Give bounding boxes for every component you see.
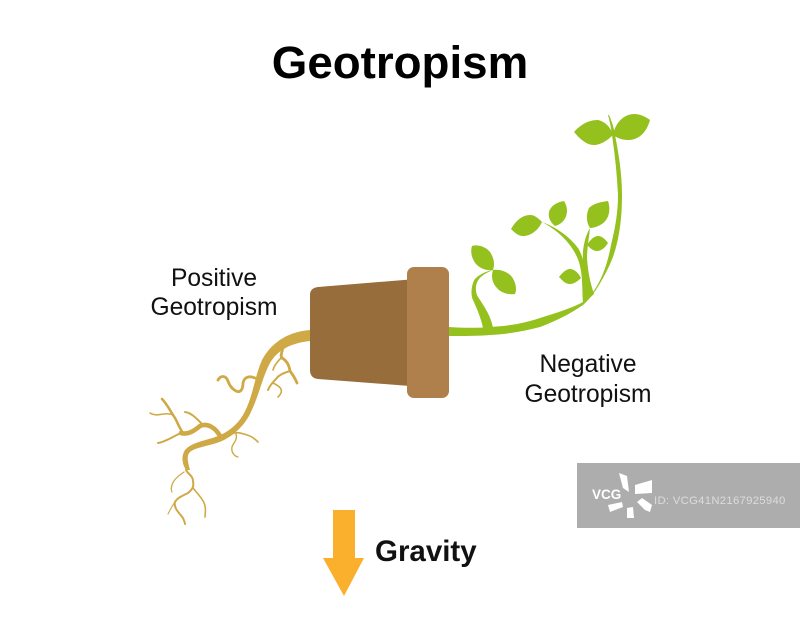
lower right root branch: [230, 433, 258, 442]
watermark: [577, 463, 800, 528]
main root: [182, 330, 310, 470]
icon: middle left leaf: [511, 215, 542, 236]
small sprout stem: [472, 270, 493, 328]
bottom root branches: [175, 470, 193, 524]
watermark logo: [592, 473, 652, 518]
upper root branch: [218, 376, 255, 392]
watermark logo: VCG: [592, 487, 621, 502]
icon: middle upper leaf: [549, 201, 567, 226]
pot body: [310, 280, 410, 386]
label: positive geotropism: Positive: [171, 265, 257, 292]
icon: right lower leaf: [587, 236, 608, 251]
plant stem and shoots: [449, 114, 650, 336]
icon: bottom sprout lower leaf: [492, 270, 516, 294]
roots: [150, 330, 310, 524]
pot rim: [407, 267, 449, 398]
icon: top right leaf: [613, 114, 650, 140]
label: negative geotropism: Geotropism: [524, 381, 652, 408]
label: negative geotropism: Negative: [539, 351, 637, 378]
middle branch: [542, 222, 594, 304]
title: Geotropism: [272, 37, 528, 88]
large left branch: [181, 425, 221, 438]
icon: right upper leaf: [587, 201, 609, 228]
icon: low leaf: [559, 269, 581, 284]
label: positive geotropism: Geotropism: [150, 294, 278, 321]
watermark id: ID: VCG41N2167925940: [654, 495, 786, 507]
gravity label: Gravity: [375, 535, 477, 568]
icon: top left leaf: [574, 120, 613, 145]
flower pot: [310, 267, 449, 398]
icon: bottom sprout upper leaf: [471, 245, 494, 270]
right root branch: [281, 347, 297, 383]
main stem: [449, 115, 622, 336]
gravity arrow: [323, 510, 364, 596]
